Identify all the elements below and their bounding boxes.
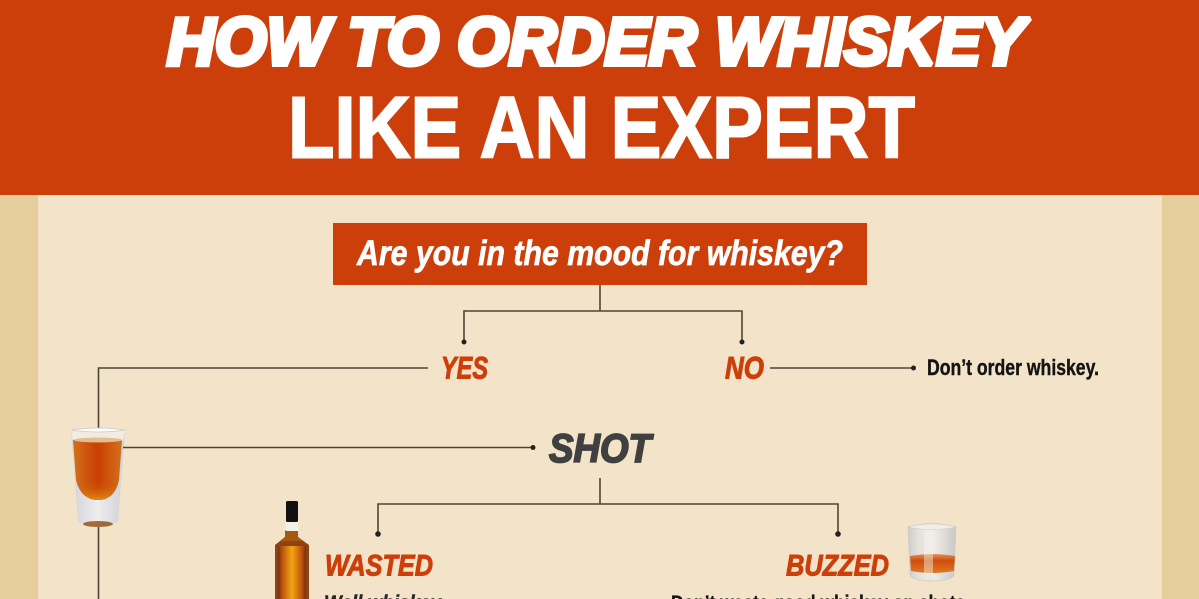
answer: don't order whiskey: Don’t order whiskey. (927, 355, 1099, 380)
center panel (38, 190, 1162, 599)
question box (333, 223, 867, 285)
title banner (0, 0, 1199, 195)
connector: question to yes and no (462, 285, 744, 344)
connector: no to answer (770, 366, 916, 370)
title line 1: HOW TO ORDER WHISKEY (167, 4, 1030, 80)
icon: shot glass (71, 428, 125, 527)
connector: shot glass down (98, 527, 100, 599)
title line 2: LIKE AN EXPERT (288, 78, 915, 176)
heading: wasted: WASTED (325, 550, 433, 582)
connector: yes to shot glass (98, 368, 428, 428)
heading: buzzed: BUZZED (786, 550, 889, 582)
connector: shot to wasted and buzzed (375, 478, 841, 537)
heading: shot: SHOT (549, 427, 654, 471)
label: no: NO (725, 350, 764, 386)
label: yes: YES (441, 350, 488, 386)
icon: rocks glass (908, 524, 956, 581)
question box: Are you in the mood for whiskey? (356, 234, 843, 273)
icon: whiskey bottle (275, 501, 309, 599)
connector: glass to shot (123, 445, 536, 450)
